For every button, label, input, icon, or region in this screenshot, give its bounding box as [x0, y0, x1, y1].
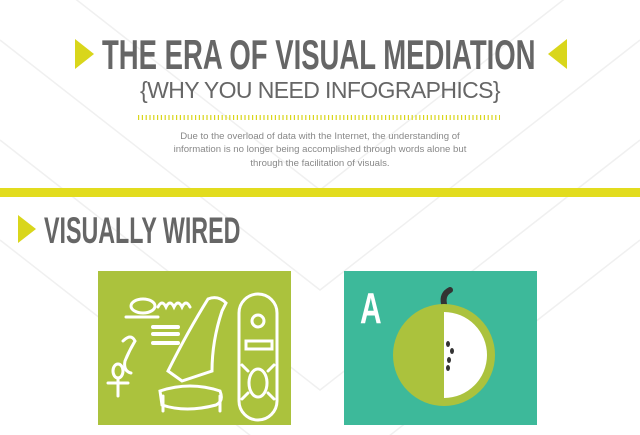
subtitle: {WHY YOU NEED INFOGRAPHICS}	[140, 77, 500, 103]
intro paragraph: Due to the overload of data with the Internet, the understanding of information is no longer being accomplished through words alone but through the facilitation of visuals.	[174, 131, 466, 169]
letter A: A	[360, 284, 382, 333]
title text: THE ERA OF VISUAL MEDIATION	[102, 31, 536, 78]
icon: triangle	[18, 215, 36, 243]
title	[75, 31, 567, 78]
panel: hieroglyphs	[98, 271, 291, 425]
icon: apple	[393, 287, 495, 406]
icon: left triangle	[75, 39, 94, 69]
panel: apple	[344, 271, 537, 425]
icon: right triangle	[548, 39, 567, 69]
section heading: VISUALLY WIRED	[44, 209, 240, 251]
